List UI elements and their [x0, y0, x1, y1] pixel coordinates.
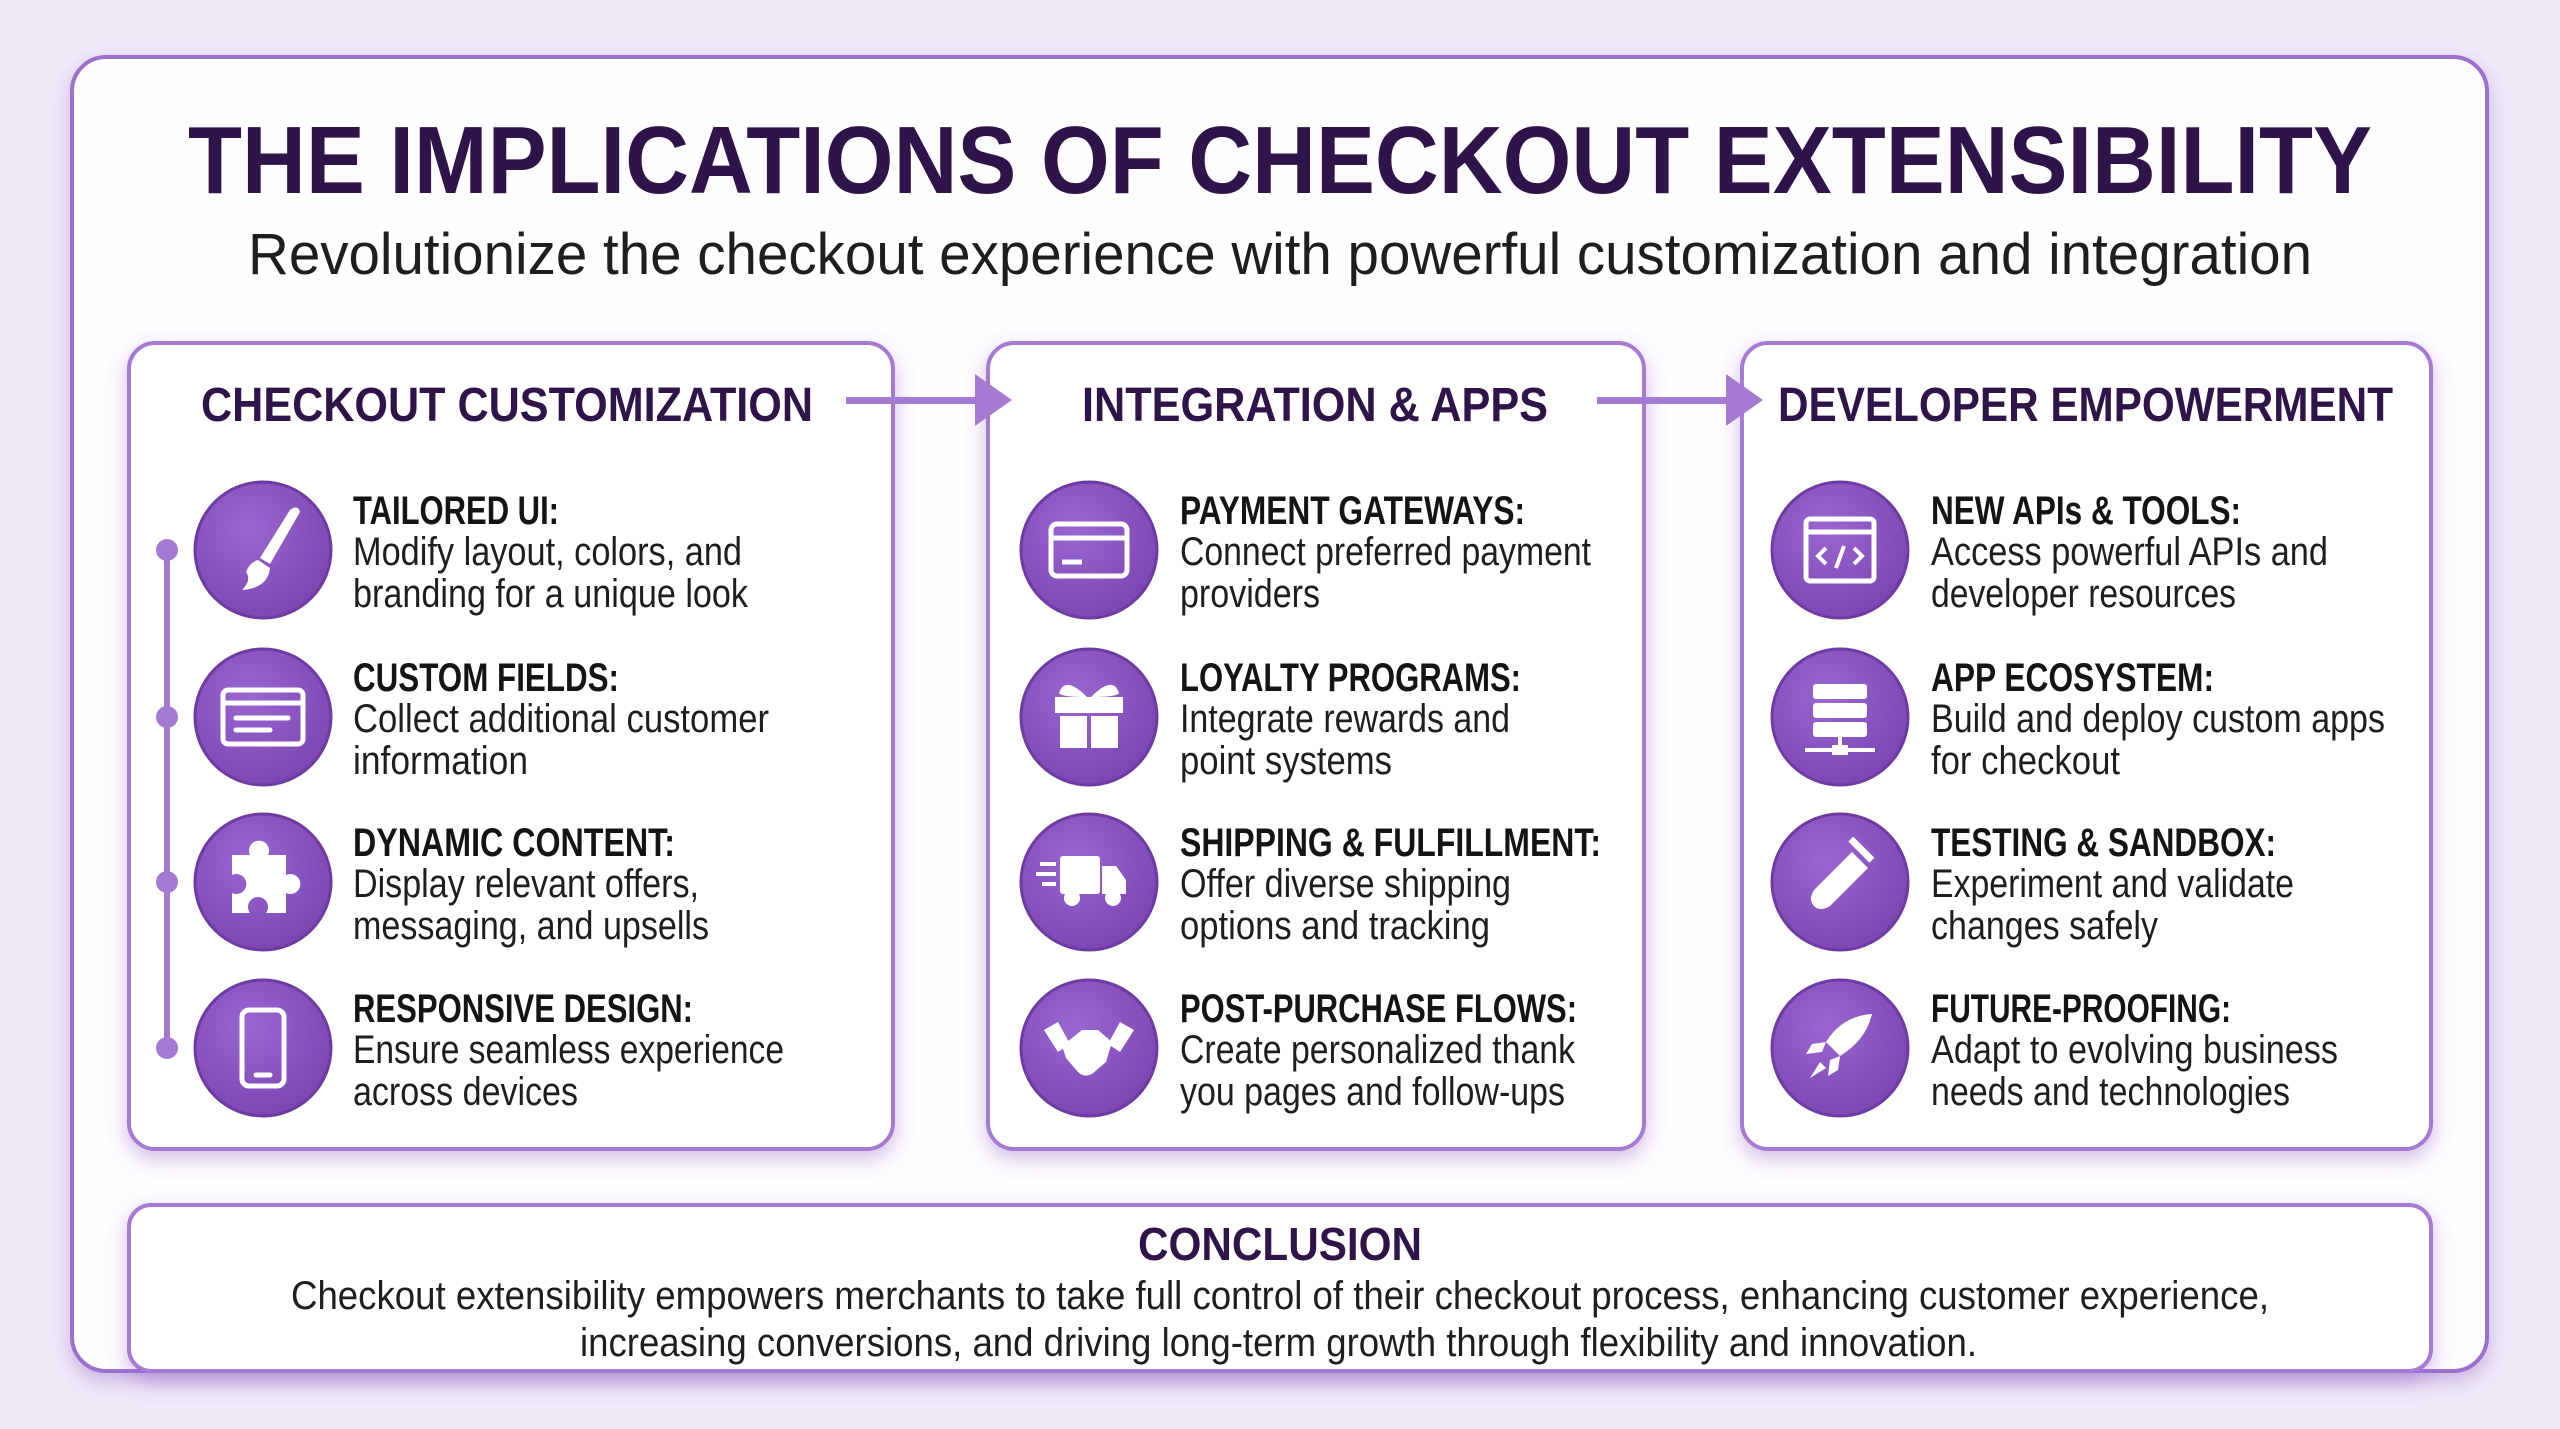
item: post-purchase flows: you pages and follow-ups — [1180, 1070, 1565, 1114]
item: testing: TESTING & SANDBOX: — [1931, 821, 2276, 865]
item: future-proofing: Adapt to evolving business — [1931, 1028, 2338, 1072]
item: loyalty programs: point systems — [1180, 739, 1392, 783]
item: dynamic content — [195, 814, 709, 950]
item: payment gateways: providers — [1180, 572, 1320, 616]
icon: test tube — [1811, 837, 1874, 909]
item: loyalty programs: Integrate rewards and — [1180, 697, 1510, 741]
item: new apis — [1772, 482, 2328, 618]
item: payment gateways — [1021, 482, 1591, 618]
item: future-proofing: needs and technologies — [1931, 1070, 2290, 1114]
item: loyalty programs — [1021, 649, 1521, 785]
item: future-proofing: FUTURE-PROOFING: — [1931, 987, 2231, 1031]
item: shipping: options and tracking — [1180, 904, 1490, 948]
item: custom fields: information — [353, 739, 528, 783]
item: custom fields: Collect additional customer — [353, 697, 769, 741]
panel: conclusion — [129, 1205, 2431, 1371]
item: new apis: NEW APIs & TOOLS: — [1931, 489, 2241, 533]
item: new apis: Access powerful APIs and — [1931, 530, 2328, 574]
icon: rocket — [1806, 1014, 1872, 1078]
item: post-purchase flows — [1021, 980, 1577, 1116]
item: shipping: Offer diverse shipping — [1180, 862, 1511, 906]
panel: integration & apps — [988, 343, 1644, 1149]
icon: puzzle — [232, 841, 300, 913]
item: testing: changes safely — [1931, 904, 2158, 948]
title: THE IMPLICATIONS OF CHECKOUT EXTENSIBILITY — [188, 107, 2372, 214]
item: post-purchase flows: Create personalized thank — [1180, 1028, 1576, 1072]
icon: phone — [242, 1010, 284, 1086]
heading: conclusion: CONCLUSION — [1138, 1218, 1422, 1270]
item: custom fields: CUSTOM FIELDS: — [353, 656, 619, 700]
item: payment gateways: Connect preferred payment — [1180, 530, 1591, 574]
heading: checkout customization: CHECKOUT CUSTOMIZATION — [201, 379, 813, 432]
item: post-purchase flows: POST-PURCHASE FLOWS: — [1180, 987, 1577, 1031]
icon: truck — [1036, 856, 1126, 906]
panel: developer empowerment — [1742, 343, 2431, 1149]
panel: checkout customization — [129, 343, 893, 1149]
conclusion text: Checkout extensibility empowers merchants to take full control of their checkout process, enhancing customer experience, — [291, 1274, 2269, 1318]
item: app ecosystem — [1772, 649, 2385, 785]
icon: servers — [1805, 684, 1875, 755]
panel: conclusion: increasing conversions, and driving long-term growth through flexibility and innovation. — [580, 1321, 1977, 1365]
arrow: customization to integration — [846, 374, 1012, 426]
item: tailored ui — [195, 482, 749, 618]
item: dynamic content: DYNAMIC CONTENT: — [353, 821, 675, 865]
heading: integration & apps: INTEGRATION & APPS — [1082, 379, 1548, 432]
item: shipping — [1021, 814, 1601, 950]
icon: brush — [242, 507, 300, 590]
item: tailored ui: TAILORED UI: — [353, 489, 559, 533]
icon: form window — [223, 690, 303, 744]
item: shipping: SHIPPING & FULFILLMENT: — [1180, 821, 1601, 865]
item: testing — [1772, 814, 2294, 950]
heading: developer empowerment: DEVELOPER EMPOWERMENT — [1778, 379, 2393, 432]
item: testing: Experiment and validate — [1931, 862, 2294, 906]
item: payment gateways: PAYMENT GATEWAYS: — [1180, 489, 1525, 533]
arrow: integration to developer — [1597, 374, 1763, 426]
icon: card — [1051, 524, 1127, 576]
item: app ecosystem: APP ECOSYSTEM: — [1931, 656, 2214, 700]
item: dynamic content: Display relevant offers, — [353, 862, 699, 906]
item: loyalty programs: LOYALTY PROGRAMS: — [1180, 656, 1521, 700]
icon: gift — [1055, 685, 1123, 748]
icon: handshake — [1044, 1022, 1134, 1076]
item: custom fields — [195, 649, 769, 785]
item: responsive design — [195, 980, 784, 1116]
item: app ecosystem: for checkout — [1931, 739, 2120, 783]
item: new apis: developer resources — [1931, 572, 2236, 616]
item: tailored ui: Modify layout, colors, and — [353, 530, 742, 574]
item: dynamic content: messaging, and upsells — [353, 904, 709, 948]
item: responsive design: across devices — [353, 1070, 578, 1114]
subtitle: Revolutionize the checkout experience with powerful customization and integration — [248, 222, 2312, 287]
item: responsive design: RESPONSIVE DESIGN: — [353, 987, 693, 1031]
item: app ecosystem: Build and deploy custom apps — [1931, 697, 2385, 741]
item: responsive design: Ensure seamless experience — [353, 1028, 784, 1072]
item: tailored ui: branding for a unique look — [353, 572, 749, 616]
icon: code window — [1806, 519, 1874, 581]
timeline — [156, 539, 178, 1059]
item: future-proofing — [1772, 980, 2338, 1116]
